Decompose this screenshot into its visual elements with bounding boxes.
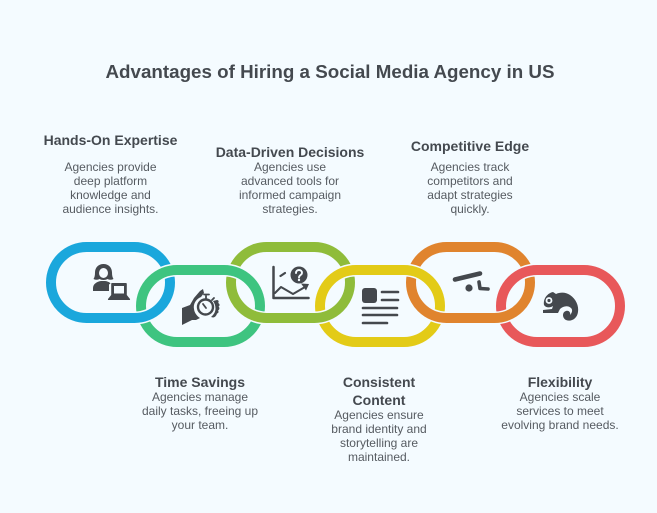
text: Consistent Content: brand identity and [331,422,427,436]
icon: chameleon [543,292,578,321]
text: Competitive Edge: adapt strategies [427,188,513,202]
text: Consistent Content: maintained. [348,450,410,464]
text: Consistent Content: Agencies ensure [334,408,424,422]
text: Consistent Content: Content [353,392,406,408]
text: Flexibility: evolving brand needs. [501,418,619,432]
text: Hands-On Expertise: Hands-On Expertise [44,132,178,148]
link overlap: olive lower crossing [231,302,350,324]
title: Advantages of Hiring a Social Media Agency in US [106,62,554,82]
text: Time Savings: your team. [172,418,228,432]
text: Competitive Edge: competitors and [427,174,513,188]
link: orange [411,247,530,318]
text: Flexibility [501,374,619,432]
text: Time Savings: Time Savings [155,374,245,390]
text: Flexibility: Flexibility [528,374,592,390]
text: Hands-On Expertise: deep platform [74,174,147,188]
text: Competitive Edge: Competitive Edge [411,138,529,154]
text: Hands-On Expertise: Agencies provide [64,160,157,174]
text: Flexibility: Agencies scale [520,390,601,404]
text: Consistent Content [331,374,427,464]
text: Data-Driven Decisions: advanced tools for [241,174,339,188]
link overlap: blue lower crossing [51,302,170,324]
text: Data-Driven Decisions: Agencies use [254,160,326,174]
text: Competitive Edge [411,138,529,216]
link: yellow [320,270,440,342]
text: Hands-On Expertise: audience insights. [62,202,159,216]
text: Hands-On Expertise [44,132,178,216]
text: Hands-On Expertise: knowledge and [70,188,151,202]
icon: chart with question mark [274,266,309,298]
text: Competitive Edge: quickly. [450,202,490,216]
icon: swimmer [455,274,488,292]
link: green [141,270,260,342]
text: Consistent Content: storytelling are [340,436,418,450]
icon: person with laptop [93,264,130,300]
icon: document [362,288,398,323]
link: olive [231,247,350,318]
text: Time Savings: daily tasks, freeing up [142,404,258,418]
text: Time Savings [142,374,258,432]
chain of six interlocked links [51,247,620,342]
text: Time Savings: Agencies manage [152,390,248,404]
text: Data-Driven Decisions: Data-Driven Decisions [216,144,365,160]
link: blue [51,247,170,318]
text: Flexibility: services to meet [516,404,604,418]
text: Data-Driven Decisions: informed campaign [239,188,341,202]
text: Competitive Edge: Agencies track [431,160,510,174]
text: Data-Driven Decisions: strategies. [262,202,318,216]
text: Data-Driven Decisions [216,144,365,216]
text: Consistent Content: Consistent [343,374,416,390]
icon: hand holding stopwatch [182,289,220,325]
link overlap: orange lower crossing [411,302,530,324]
link: red [501,270,620,342]
